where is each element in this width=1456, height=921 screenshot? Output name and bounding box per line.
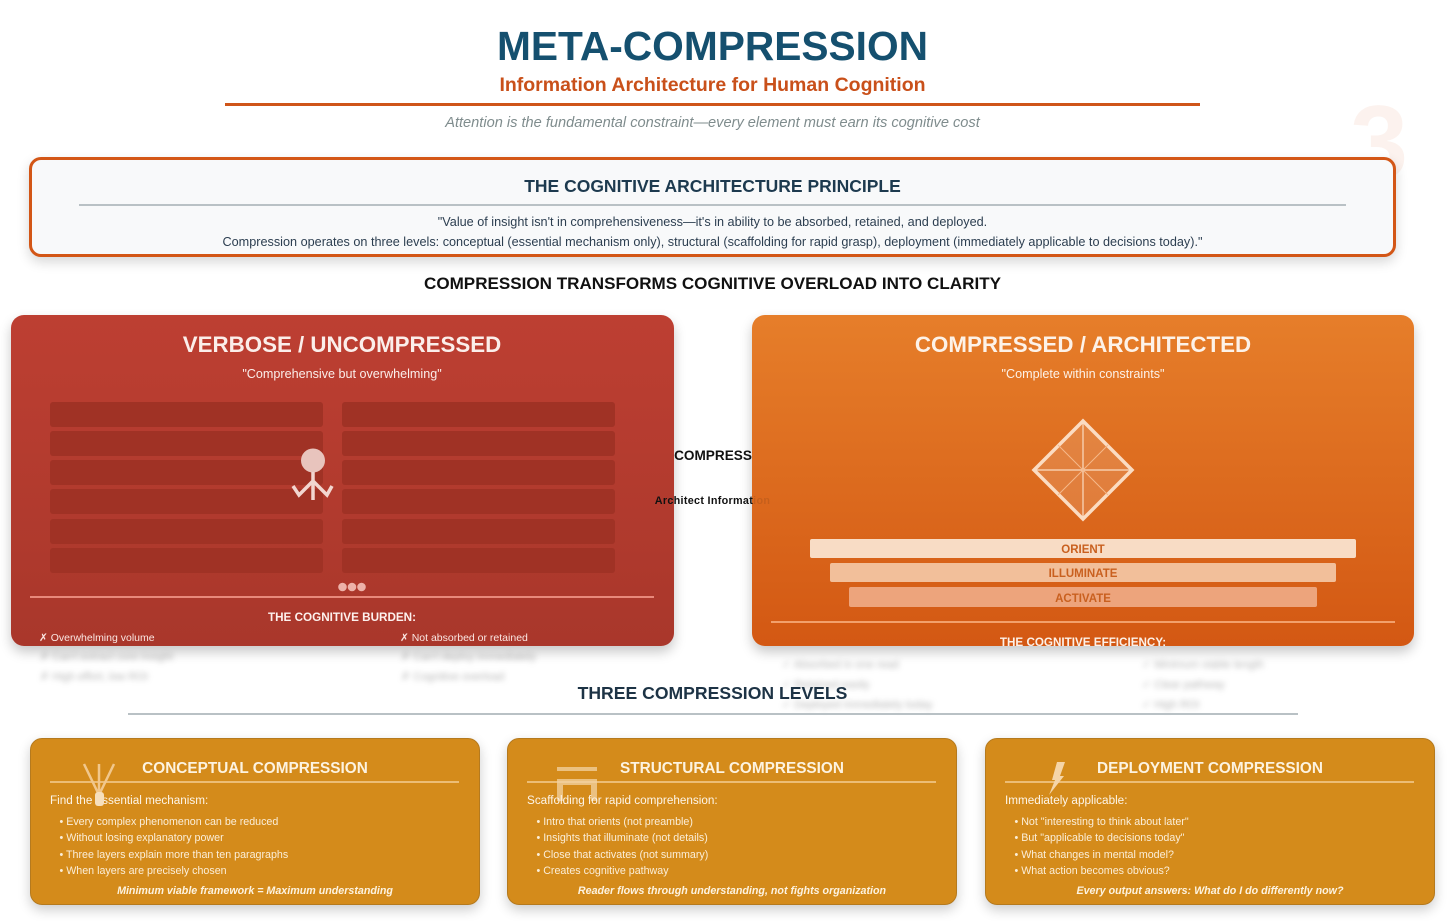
layer: activate: ACTIVATE bbox=[1055, 593, 1111, 605]
section heading: transformation: COMPRESSION TRANSFORMS COGNITIVE OVERLOAD INTO CLARITY bbox=[424, 274, 1001, 293]
subtitle: Information Architecture for Human Cognition bbox=[499, 74, 926, 96]
conceptual heading: CONCEPTUAL COMPRESSION bbox=[142, 760, 368, 777]
panel: compressed / architected bbox=[752, 315, 1414, 646]
overflow text: burden list, right column: ✗ Can't deploy immediately bbox=[401, 651, 536, 663]
conceptual bullets bbox=[60, 816, 288, 877]
overflow text: efficiency list, left column bbox=[782, 659, 933, 711]
arrow label: compress: COMPRESS bbox=[674, 448, 752, 463]
overflow text: efficiency list, right column: ✓ Clear pathway bbox=[1142, 679, 1225, 691]
layer: activate bbox=[849, 587, 1317, 607]
deployment lead: Immediately applicable: bbox=[1005, 794, 1127, 807]
divider bbox=[771, 621, 1395, 623]
verbose quote: "Comprehensive but overwhelming" bbox=[242, 367, 442, 381]
deployment heading: DEPLOYMENT COMPRESSION bbox=[1097, 760, 1323, 777]
divider bbox=[30, 596, 654, 598]
deployment bullets: • Not "interesting to think about later" bbox=[1014, 816, 1189, 828]
deployment bullets: • What action becomes obvious? bbox=[1014, 865, 1170, 877]
conceptual lead: Find the essential mechanism: bbox=[50, 794, 208, 807]
deployment bullets: • What changes in mental model? bbox=[1014, 849, 1174, 861]
tagline: Attention is the fundamental constraint—every element must earn its cognitive cost bbox=[445, 115, 980, 131]
icon: funnel bbox=[83, 764, 115, 806]
conceptual bullets: • Every complex phenomenon can be reduced bbox=[60, 816, 278, 828]
conceptual bullets: • When layers are precisely chosen bbox=[60, 865, 227, 877]
title rule bbox=[225, 103, 1200, 106]
structural heading: STRUCTURAL COMPRESSION bbox=[620, 760, 844, 777]
layer: orient: ORIENT bbox=[1061, 544, 1105, 556]
overflow text: efficiency list, right column bbox=[1142, 659, 1264, 712]
verbose heading: VERBOSE / UNCOMPRESSED bbox=[183, 332, 501, 357]
icon: overwhelmed figure bbox=[292, 448, 334, 500]
overflow text: burden list, right column: ✗ Cognitive overload bbox=[401, 671, 504, 683]
overflow text: efficiency list, left column: ✓ Absorbed in one read bbox=[782, 659, 899, 671]
principle quote bbox=[222, 215, 1202, 249]
structural bullets: • Intro that orients (not preamble) bbox=[536, 816, 693, 828]
layer: illuminate bbox=[830, 563, 1336, 582]
conceptual conclusion: Minimum viable framework = Maximum understanding bbox=[117, 885, 393, 897]
more indicator dots bbox=[338, 582, 366, 592]
compressed quote: "Complete within constraints" bbox=[1002, 367, 1164, 381]
overflow text: efficiency list, right column: ✓ High ROI bbox=[1142, 699, 1200, 711]
panel: cognitive architecture principle bbox=[29, 157, 1396, 257]
panel: structural compression bbox=[507, 738, 957, 905]
structural lead: Scaffolding for rapid comprehension: bbox=[527, 794, 718, 807]
principle quote: "Value of insight isn't in comprehensiveness—it's in ability to be absorbed, retained, and deployed. bbox=[438, 215, 987, 229]
structural bullets: • Creates cognitive pathway bbox=[536, 865, 669, 877]
arrow caption: Architect Information bbox=[655, 495, 770, 507]
watermark number: 3 bbox=[1350, 85, 1408, 201]
burden item right: ✗ Not absorbed or retained bbox=[400, 632, 528, 644]
structural bullets: • Insights that illuminate (not details) bbox=[536, 832, 708, 844]
conceptual bullets: • Without losing explanatory power bbox=[60, 832, 224, 844]
overflow text: burden list, left column: ✗ High effort, low ROI bbox=[40, 671, 148, 683]
section heading: three levels: THREE COMPRESSION LEVELS bbox=[578, 683, 847, 703]
icon: diamond framework bbox=[1032, 418, 1134, 522]
deployment conclusion: Every output answers: What do I do differently now? bbox=[1076, 885, 1344, 897]
structural bullets bbox=[536, 816, 708, 877]
icon: lightning bolt bbox=[1049, 762, 1065, 795]
overflow text: burden list, left column bbox=[40, 651, 174, 684]
principle quote: Compression operates on three levels: conceptual (essential mechanism only), structural (scaffolding for rapid grasp), deployment (immediately applicable to decisions today)." bbox=[222, 235, 1202, 249]
overflow text: efficiency list, left column: ✓ Deployed immediately today bbox=[782, 699, 932, 711]
structural conclusion: Reader flows through understanding, not fights organization bbox=[578, 885, 886, 897]
icon: scaffold bbox=[557, 767, 597, 801]
overflow text: burden list, left column: ✗ Can't extract core insight bbox=[40, 651, 173, 663]
section rule bbox=[128, 713, 1298, 715]
deployment bullets: • But "applicable to decisions today" bbox=[1014, 832, 1184, 844]
burden heading: THE COGNITIVE BURDEN: bbox=[268, 611, 416, 624]
principle heading: THE COGNITIVE ARCHITECTURE PRINCIPLE bbox=[524, 176, 901, 196]
deployment bullets bbox=[1014, 816, 1189, 877]
panel: verbose / uncompressed bbox=[11, 315, 674, 646]
text blocks grid bbox=[50, 402, 615, 573]
layer: orient bbox=[810, 539, 1356, 558]
layer: illuminate: ILLUMINATE bbox=[1049, 568, 1117, 580]
conceptual bullets: • Three layers explain more than ten paragraphs bbox=[60, 849, 288, 861]
panel: deployment compression bbox=[985, 738, 1435, 905]
overflow text: burden list, right column bbox=[401, 651, 536, 684]
overflow text: efficiency list, right column: ✓ Minimum viable length bbox=[1142, 659, 1264, 671]
title: META-COMPRESSION bbox=[497, 23, 928, 69]
compressed heading: COMPRESSED / ARCHITECTED bbox=[915, 332, 1251, 357]
burden item left: ✗ Overwhelming volume bbox=[39, 632, 155, 644]
overflow text: efficiency list, left column: ✓ Retained easily bbox=[782, 679, 869, 691]
panel: conceptual compression bbox=[30, 738, 480, 905]
structural bullets: • Close that activates (not summary) bbox=[536, 849, 708, 861]
